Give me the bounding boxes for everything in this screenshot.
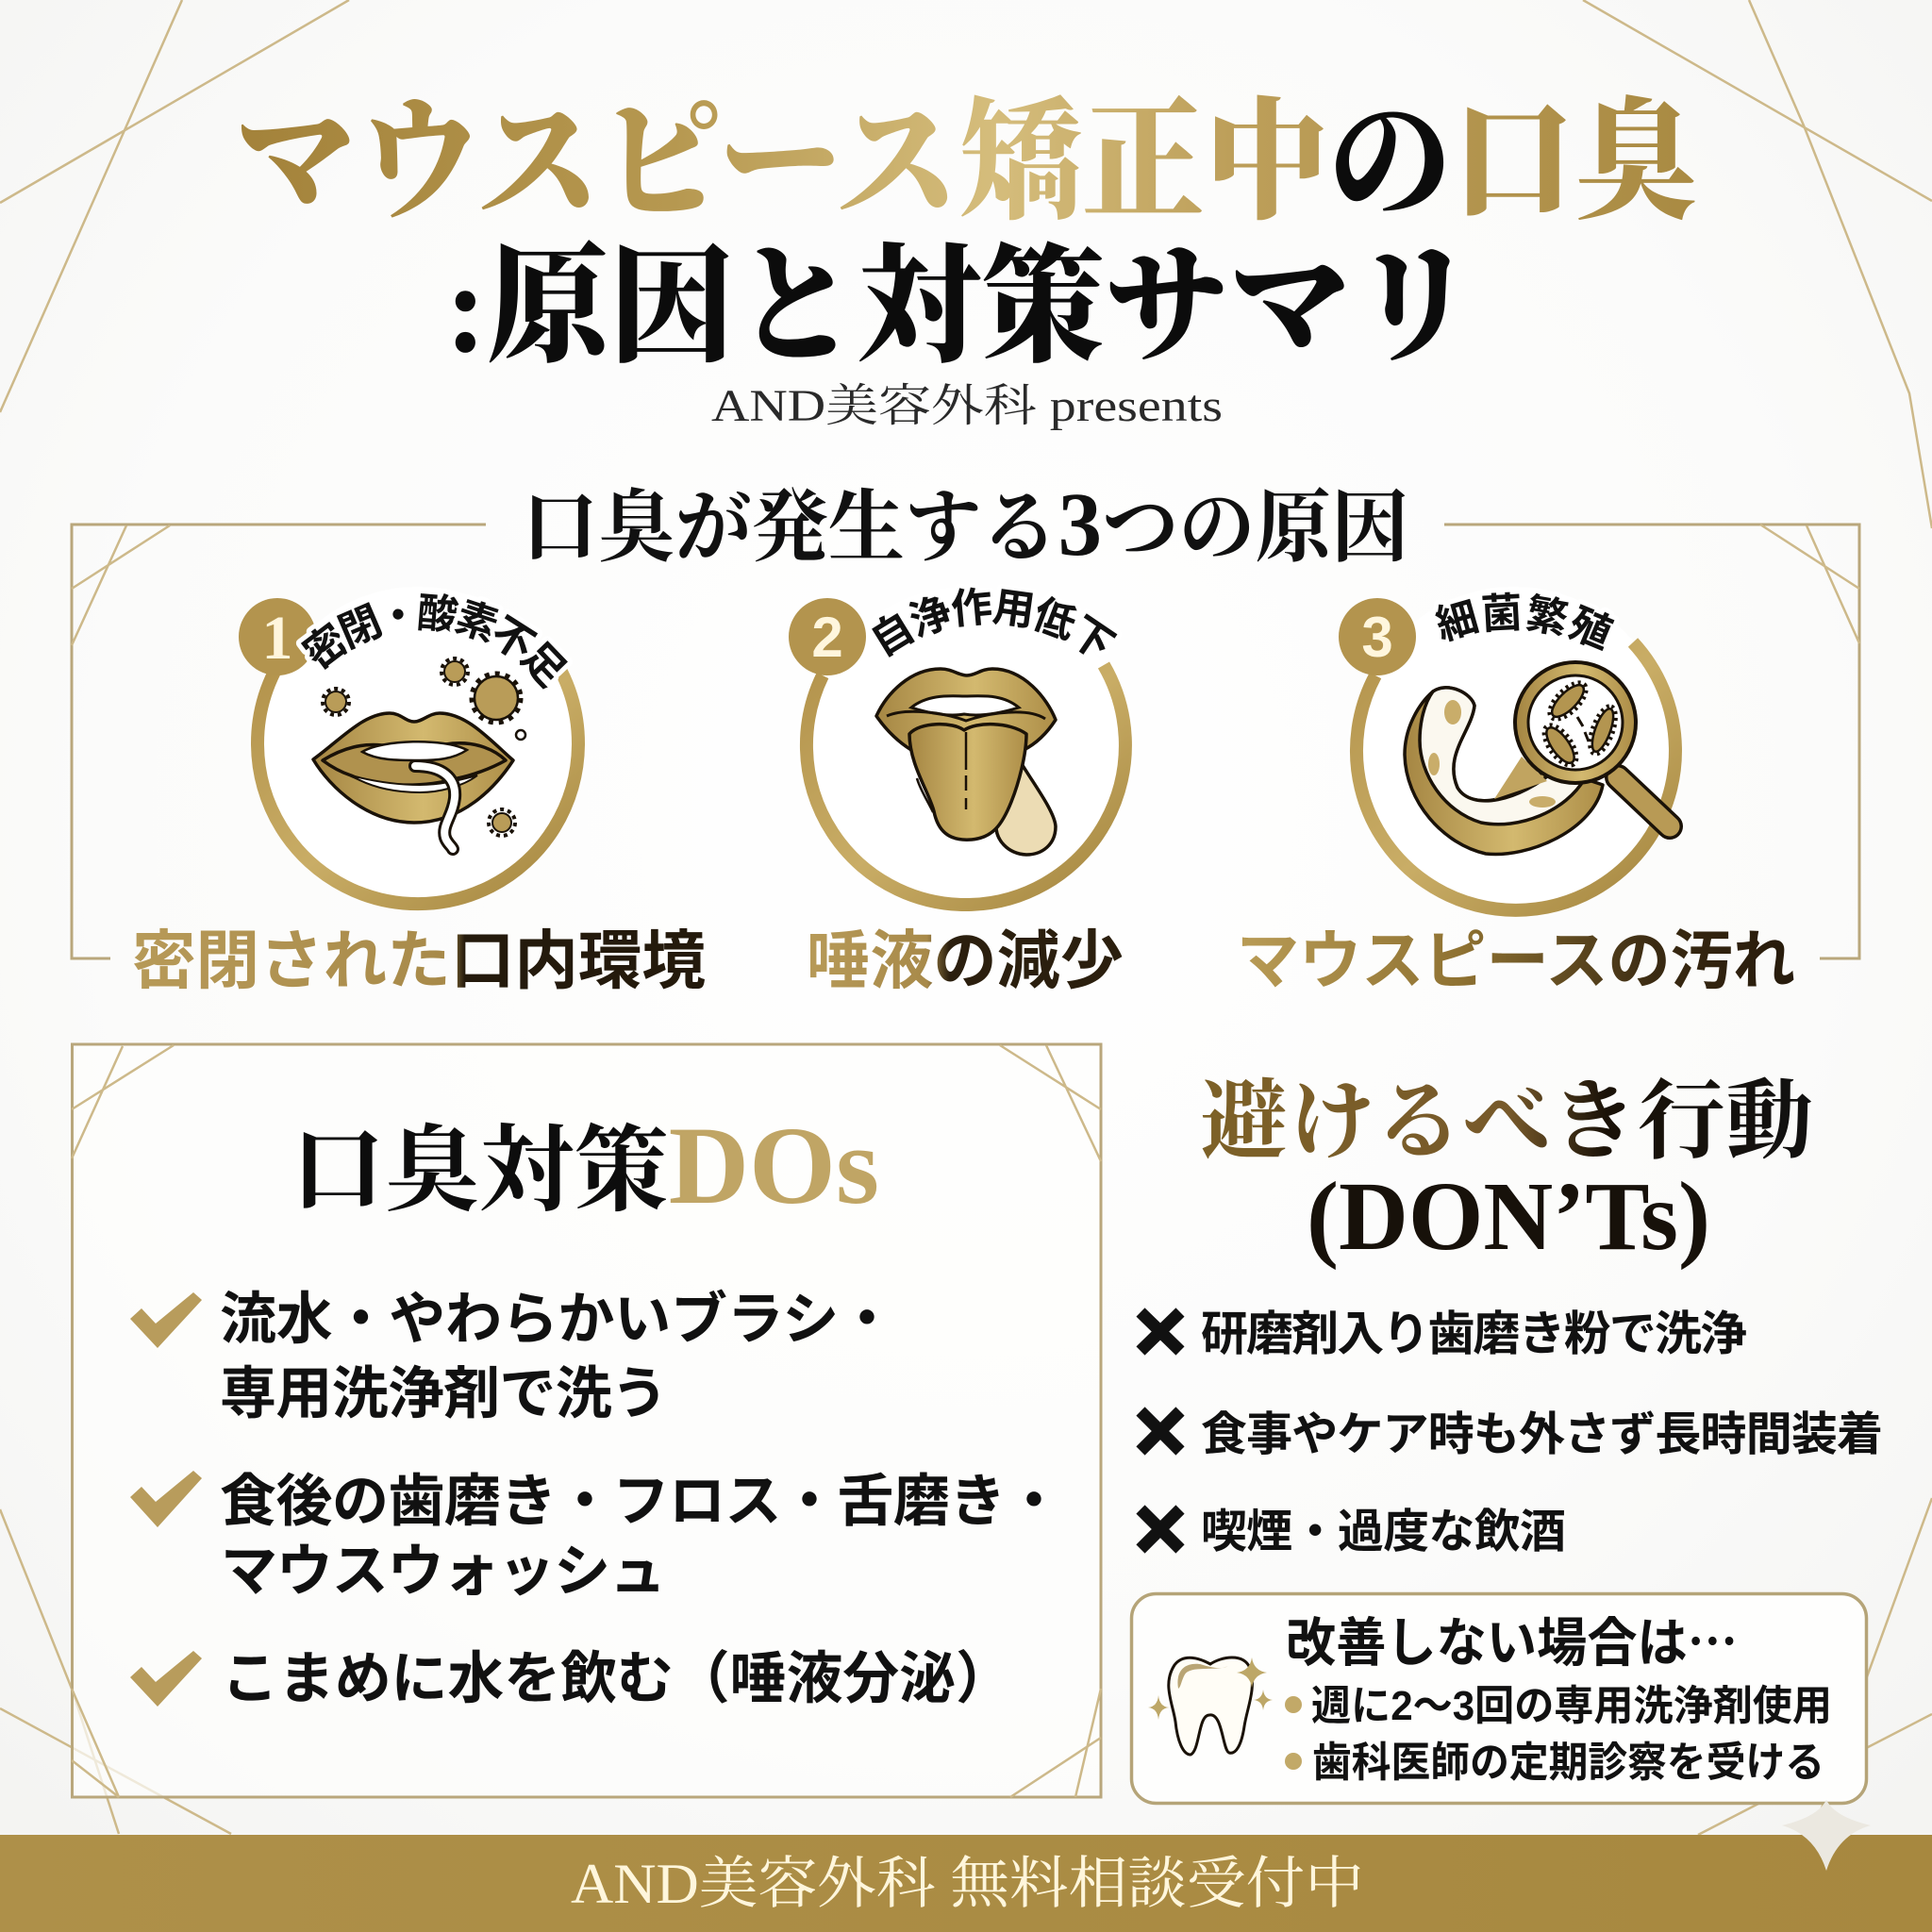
x icon 3 bbox=[1141, 1509, 1180, 1549]
cause 2: 自浄作用低下 bbox=[872, 587, 1117, 658]
cause 2 bbox=[789, 587, 1132, 911]
footer text: AND美容外科 無料相談受付中 bbox=[571, 1853, 1364, 1915]
panel: DOs bbox=[72, 1044, 1101, 1797]
callout line 1: 週に2〜3回の専用洗浄剤使用 bbox=[1311, 1683, 1832, 1729]
DON'Ts heading: 避けるべき行動 bbox=[1200, 1074, 1813, 1170]
presenter line: AND美容外科 presents bbox=[711, 381, 1223, 431]
title line 2: :原因と対策サマリ bbox=[445, 238, 1475, 379]
icon: stained mouthpiece under magnifier bbox=[1405, 660, 1670, 855]
check icon 2 bbox=[130, 1471, 202, 1527]
callout line 2: 歯科医師の定期診察を受ける bbox=[1312, 1740, 1824, 1786]
cause 1: 1 bbox=[262, 604, 292, 673]
callout heading: 改善しない場合は… bbox=[1286, 1601, 1738, 1677]
cause 1 bbox=[239, 593, 585, 911]
x icon 1 bbox=[1141, 1312, 1180, 1351]
DO item 1: 流水・やわらかいブラシ・ bbox=[220, 1288, 895, 1351]
panel: DON'Ts bbox=[1141, 1074, 1883, 1557]
DON'T item 3: 喫煙・過度な飲酒 bbox=[1201, 1507, 1566, 1557]
check icon 1 bbox=[130, 1292, 202, 1348]
x icon 2 bbox=[1141, 1411, 1180, 1451]
icon: lips with germs bbox=[313, 658, 525, 849]
DOs heading: 口臭対策DOs bbox=[291, 1104, 879, 1227]
check icon 3 bbox=[130, 1651, 202, 1707]
DON'T item 1: 研磨剤入り歯磨き粉で洗浄 bbox=[1201, 1307, 1747, 1360]
DO item 3: こまめに水を飲む（唾液分泌） bbox=[222, 1647, 1012, 1710]
causes heading: 口臭が発生する3つの原因 bbox=[522, 474, 1408, 575]
footer bar bbox=[0, 1800, 1932, 1932]
cause 1 caption: 密閉された口内環境 bbox=[132, 925, 706, 997]
cause 1: 密閉・酸素不足 bbox=[296, 593, 568, 690]
cause 3 caption: マウスピースの汚れ bbox=[1237, 925, 1795, 997]
cause 3: 細菌繁殖 bbox=[1435, 592, 1615, 651]
icon: sparkle bbox=[1782, 1800, 1871, 1871]
DON'Ts subheading: (DON’Ts) bbox=[1307, 1162, 1710, 1271]
icon: tooth with sparkles bbox=[1148, 1657, 1273, 1755]
DON'T item 2: 食事やケア時も外さず長時間装着 bbox=[1201, 1409, 1883, 1460]
bullet 1 bbox=[1285, 1696, 1302, 1713]
callout: if no improvement bbox=[1132, 1594, 1866, 1804]
DO item 2: 食後の歯磨き・フロス・舌磨き・ bbox=[220, 1470, 1062, 1533]
cause 2: 2 bbox=[811, 606, 843, 669]
cause 3: 3 bbox=[1361, 606, 1393, 669]
cause 2 caption: 唾液の減少 bbox=[807, 925, 1124, 997]
DO item 1: 専用洗浄剤で洗う bbox=[220, 1362, 668, 1425]
DO item 2: マウスウォッシュ bbox=[221, 1540, 666, 1603]
title bbox=[234, 91, 1698, 431]
bullet 2 bbox=[1285, 1753, 1302, 1770]
title line 1: マウスピース矯正中の口臭 bbox=[234, 91, 1698, 237]
cause 3 bbox=[1339, 592, 1683, 917]
icon: tongue and saliva drop bbox=[876, 669, 1056, 855]
panel: causes bbox=[70, 474, 1860, 997]
